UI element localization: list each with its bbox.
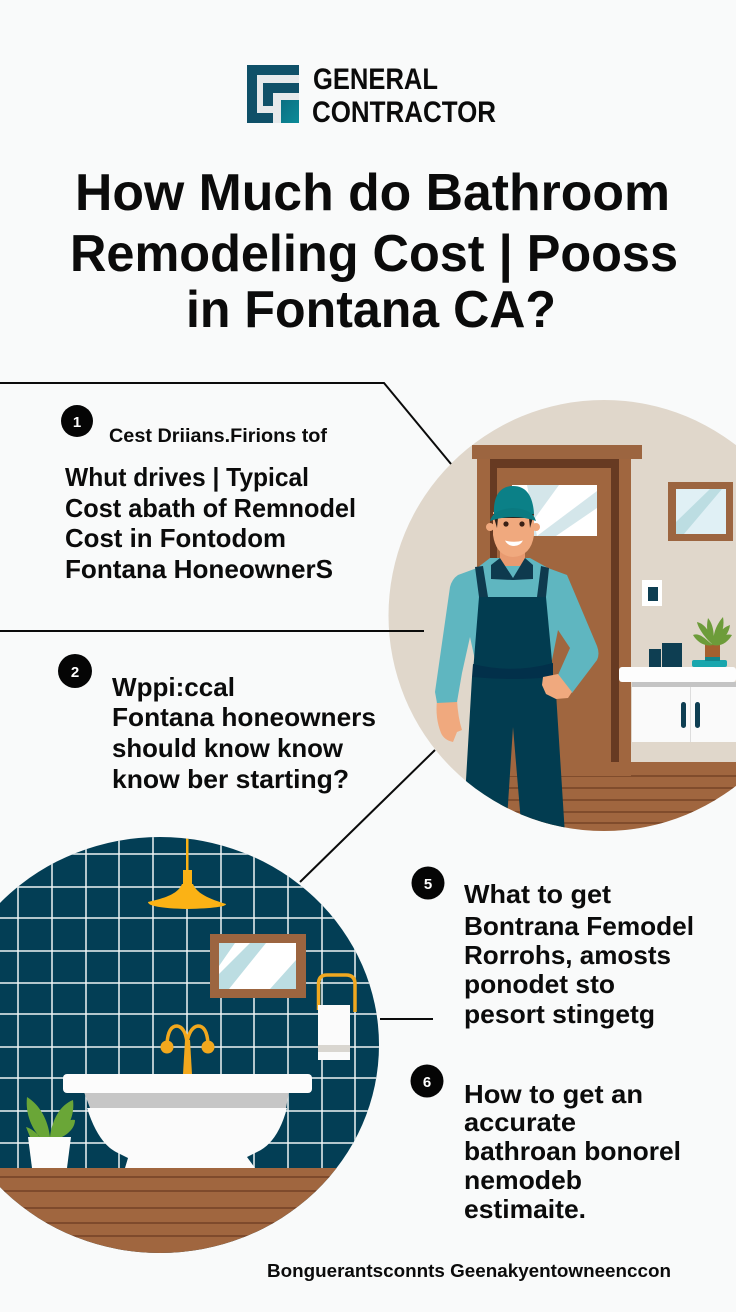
footer: Bonguerantsconnts Geenakyentowneenccon (267, 1261, 671, 1281)
connector lines (0, 383, 451, 1019)
section 2 body: should know know (112, 733, 344, 763)
right hand (542, 674, 572, 699)
illustration: contractor in bathroom (385, 395, 736, 835)
contractor figure (435, 486, 598, 835)
badge 2: 2 (71, 664, 79, 681)
logo (247, 63, 496, 129)
straps (475, 566, 549, 597)
cap (490, 486, 536, 521)
pendant lamp (148, 835, 226, 909)
logo mark (247, 65, 299, 123)
potted plant (26, 1097, 75, 1168)
badge 6 (410, 1064, 444, 1098)
eyes (503, 521, 525, 527)
ear right (534, 523, 540, 531)
wall mirror (668, 482, 733, 541)
section 1 body (65, 462, 356, 584)
logo wordmark (312, 63, 496, 129)
section 6 body: nemodeb (464, 1165, 582, 1195)
logo wordmark: CONTRACTOR (312, 96, 496, 129)
section 1 body: Cost in Fontodom (65, 523, 286, 553)
face (493, 512, 534, 557)
toiletries and plant (649, 617, 732, 667)
badge 5 (412, 866, 444, 900)
title: Remodeling Cost | Pooss (70, 225, 678, 283)
floor (500, 762, 736, 832)
section 1 body: Cost abath of Remnodel (65, 493, 356, 523)
light switch (642, 580, 662, 606)
section 5 body (464, 879, 694, 1029)
badge 2 (58, 654, 92, 688)
section 6 body: bathroan bonorel (464, 1136, 681, 1166)
vanity cabinet (619, 667, 736, 742)
section 5 body: Rorrohs, amosts (464, 940, 671, 970)
illustration: tiled bathroom with tub (0, 830, 385, 1258)
badge 1: 1 (73, 414, 81, 431)
section 1 body: Fontana HoneownerS (65, 554, 333, 584)
section 2 body (112, 672, 376, 794)
section 5 body: What to get (464, 879, 611, 909)
ears (486, 523, 493, 531)
section 6 body: How to get an (464, 1079, 643, 1109)
section 2 body: know ber starting? (112, 764, 349, 794)
section 2 body: Wppi:ccal (112, 672, 235, 702)
bathtub (63, 1074, 312, 1168)
tile grid (0, 830, 385, 1170)
section 2 body: Fontana honeowners (112, 702, 376, 732)
door (472, 445, 642, 776)
left hand (436, 700, 462, 742)
section 6 body (464, 1079, 681, 1224)
section 5 body: ponodet sto (464, 969, 615, 999)
bib (473, 597, 553, 672)
wood floor (0, 1168, 336, 1253)
hair (493, 514, 534, 528)
section 2 (58, 654, 376, 794)
faucet (160, 1026, 214, 1074)
legs (466, 677, 565, 835)
badge 1 (61, 405, 93, 437)
collar (491, 558, 533, 580)
section 6 body: estimaite. (464, 1194, 586, 1224)
title: How Much do Bathroom (75, 164, 670, 222)
neck (500, 552, 525, 566)
section 6 body: accurate (464, 1107, 576, 1137)
section 5 (412, 866, 694, 1029)
smile (505, 540, 523, 546)
section 5 body: pesort stingetg (464, 999, 655, 1029)
badge 5: 5 (424, 876, 432, 893)
shirt chest panel (505, 566, 520, 578)
logo wordmark: GENERAL (313, 63, 438, 96)
framed mirror (210, 934, 306, 998)
section 6 (410, 1064, 681, 1224)
belt (472, 663, 553, 679)
title (70, 164, 678, 339)
section 5 body: Bontrana Femodel (464, 911, 694, 941)
towel rail and towel (318, 975, 355, 1060)
shirt (435, 558, 598, 703)
section 1 subheading: Cest Driians.Firions tof (109, 426, 328, 447)
title: in Fontana CA? (186, 281, 556, 339)
section 1 body: Whut drives | Typical (65, 462, 309, 492)
section 1 (61, 405, 356, 584)
badge 6: 6 (423, 1074, 431, 1091)
